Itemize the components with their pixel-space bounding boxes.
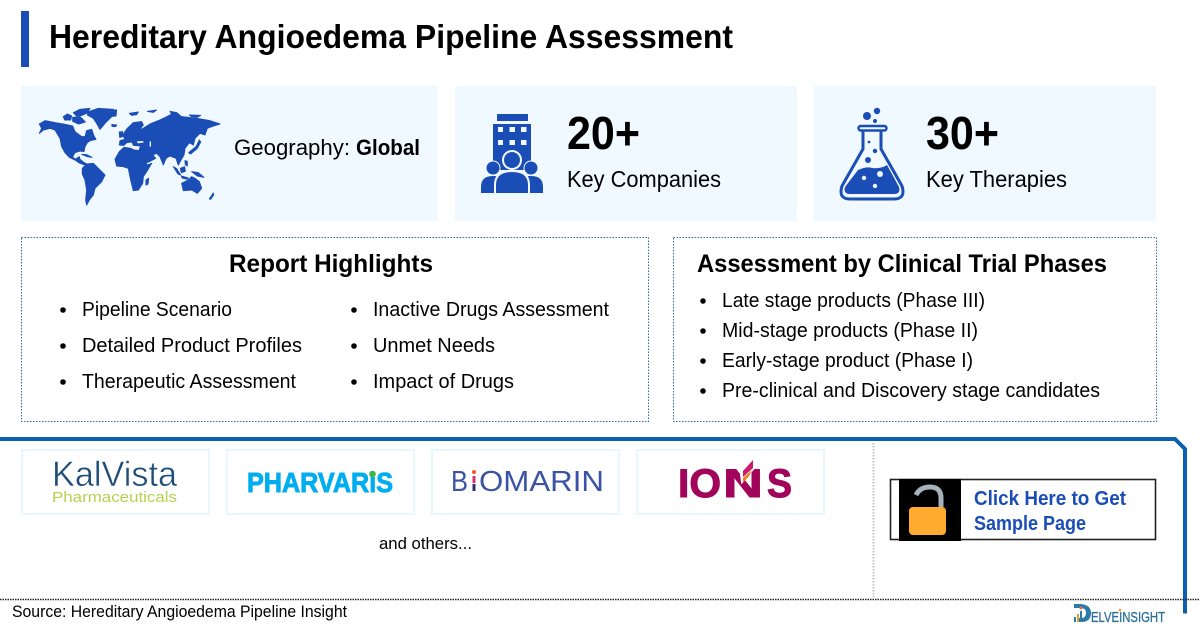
icon: world map — [39, 108, 220, 205]
list: highlights: Impact of Drugs — [373, 370, 514, 393]
text: and others: and others... — [379, 534, 472, 553]
list: phases: Pre-clinical and Discovery stage candidates — [722, 380, 1100, 402]
list: highlights — [60, 298, 609, 393]
heading: clinical trial phases: Assessment by Clinical Trial Phases — [697, 250, 1107, 278]
panel: key companies: Key Companies — [567, 166, 721, 192]
panel: geography: Geography: — [234, 135, 350, 160]
list: highlights: Detailed Product Profiles — [82, 334, 302, 357]
list: highlights: Unmet Needs — [373, 334, 495, 357]
panel: geography — [21, 86, 438, 221]
panel: key companies — [455, 86, 797, 221]
call to action: sample page: Click Here to Get — [974, 487, 1126, 510]
list: phases: Early-stage product (Phase I) — [722, 350, 973, 372]
panel: key therapies — [814, 86, 1156, 221]
icon: open padlock — [909, 487, 946, 535]
heading: report highlights: Report Highlights — [229, 250, 433, 278]
call to action: sample page — [890, 479, 1156, 541]
logo: BioMarin: B — [451, 466, 468, 498]
logo: Ionis: N — [723, 462, 763, 506]
logo: Pharvaris: PHARVARiS — [247, 467, 393, 498]
panel: key companies: 20+ — [567, 107, 640, 159]
list: highlights: Therapeutic Assessment — [82, 370, 296, 393]
logo: Ionis: IO — [678, 462, 721, 506]
panel: key therapies: 30+ — [926, 107, 999, 159]
icon: flask — [841, 108, 903, 199]
title: Hereditary Angioedema Pipeline Assessment — [49, 18, 733, 55]
logo: BioMarin: OMARIN — [479, 466, 604, 498]
list: phases: Mid-stage products (Phase II) — [722, 320, 978, 342]
panel: report highlights — [22, 238, 648, 422]
panel: key therapies: Key Therapies — [926, 166, 1067, 192]
logo: Ionis: S — [767, 462, 792, 506]
icon: building with people — [481, 114, 543, 194]
list: phases: Late stage products (Phase III) — [722, 290, 985, 312]
logo: Ionis — [637, 450, 824, 514]
title — [21, 11, 733, 67]
logo: KalVista: Pharmaceuticals — [52, 489, 177, 506]
logo: KalVista: KalVista — [52, 455, 178, 494]
list: highlights: Pipeline Scenario — [82, 298, 232, 321]
logo: DelveInsight — [1074, 604, 1165, 626]
logo: Pharvaris — [227, 450, 414, 514]
list: highlights: Inactive Drugs Assessment — [373, 298, 609, 321]
logo: BioMarin — [432, 450, 619, 514]
logo: DelveInsight: ELVEINSIGHT — [1091, 610, 1165, 626]
list: phases — [700, 290, 1100, 402]
logo: KalVista — [22, 450, 209, 514]
panel: clinical trial phases — [674, 238, 1156, 422]
source note: Source: Hereditary Angioedema Pipeline Insight — [12, 603, 347, 621]
call to action: sample page: Sample Page — [974, 512, 1086, 535]
panel: geography: Global — [356, 135, 420, 160]
